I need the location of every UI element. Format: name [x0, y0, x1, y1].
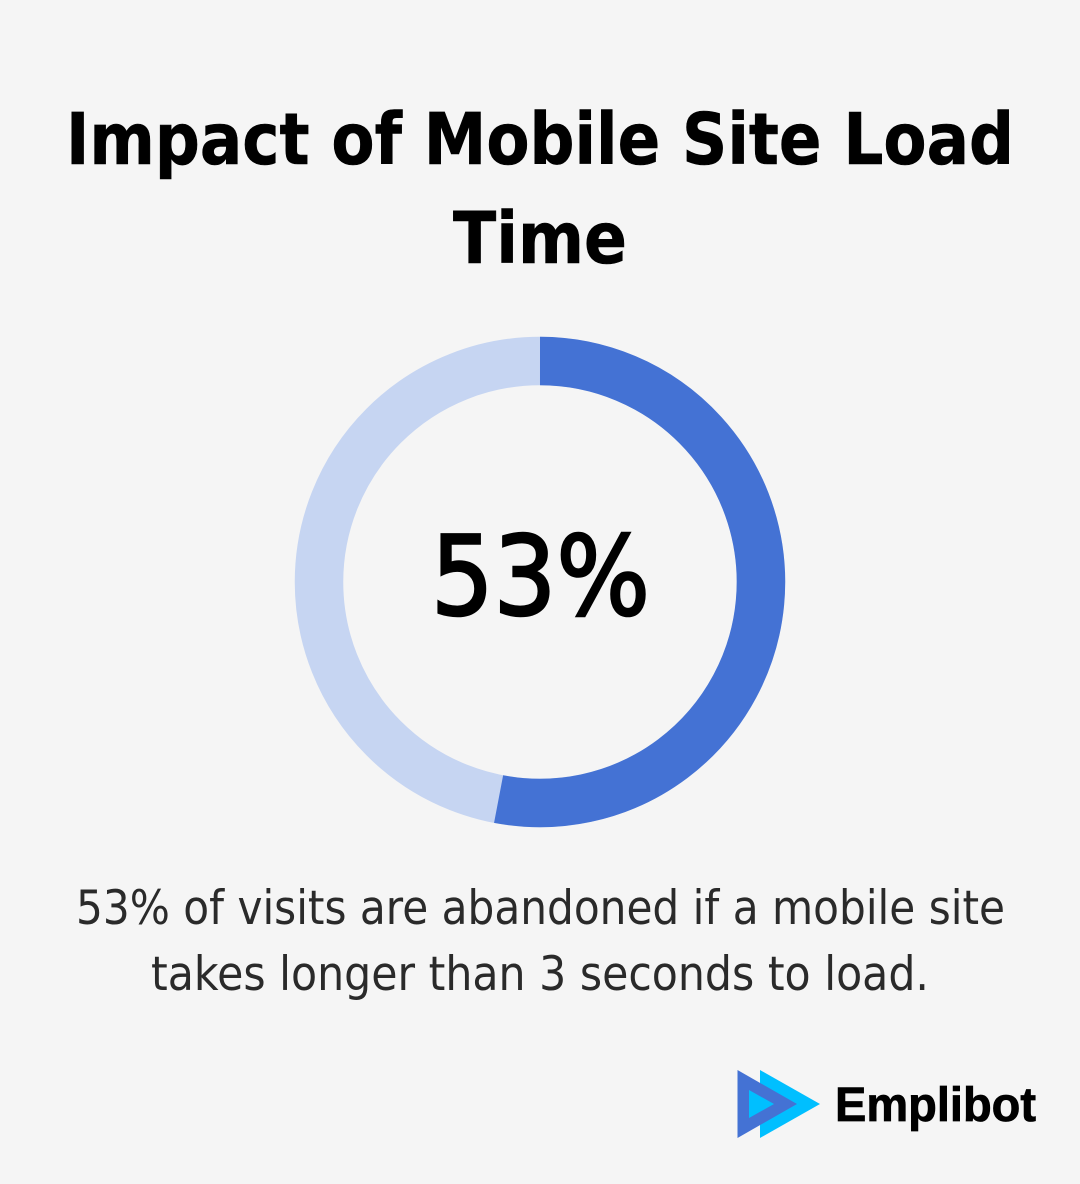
donut chart: 53% — [319, 361, 761, 803]
title: Time — [453, 197, 627, 280]
logo: Emplibot — [738, 1070, 1036, 1138]
description text — [76, 881, 1005, 1002]
description text: takes longer than 3 seconds to load. — [151, 947, 929, 1002]
description text: 53% of visits are abandoned if a mobile site — [76, 881, 1005, 936]
logo wordmark: Emplibot — [835, 1079, 1036, 1132]
icon: play triangles — [738, 1070, 820, 1138]
central value: 53% — [431, 512, 650, 640]
title — [66, 98, 1014, 280]
